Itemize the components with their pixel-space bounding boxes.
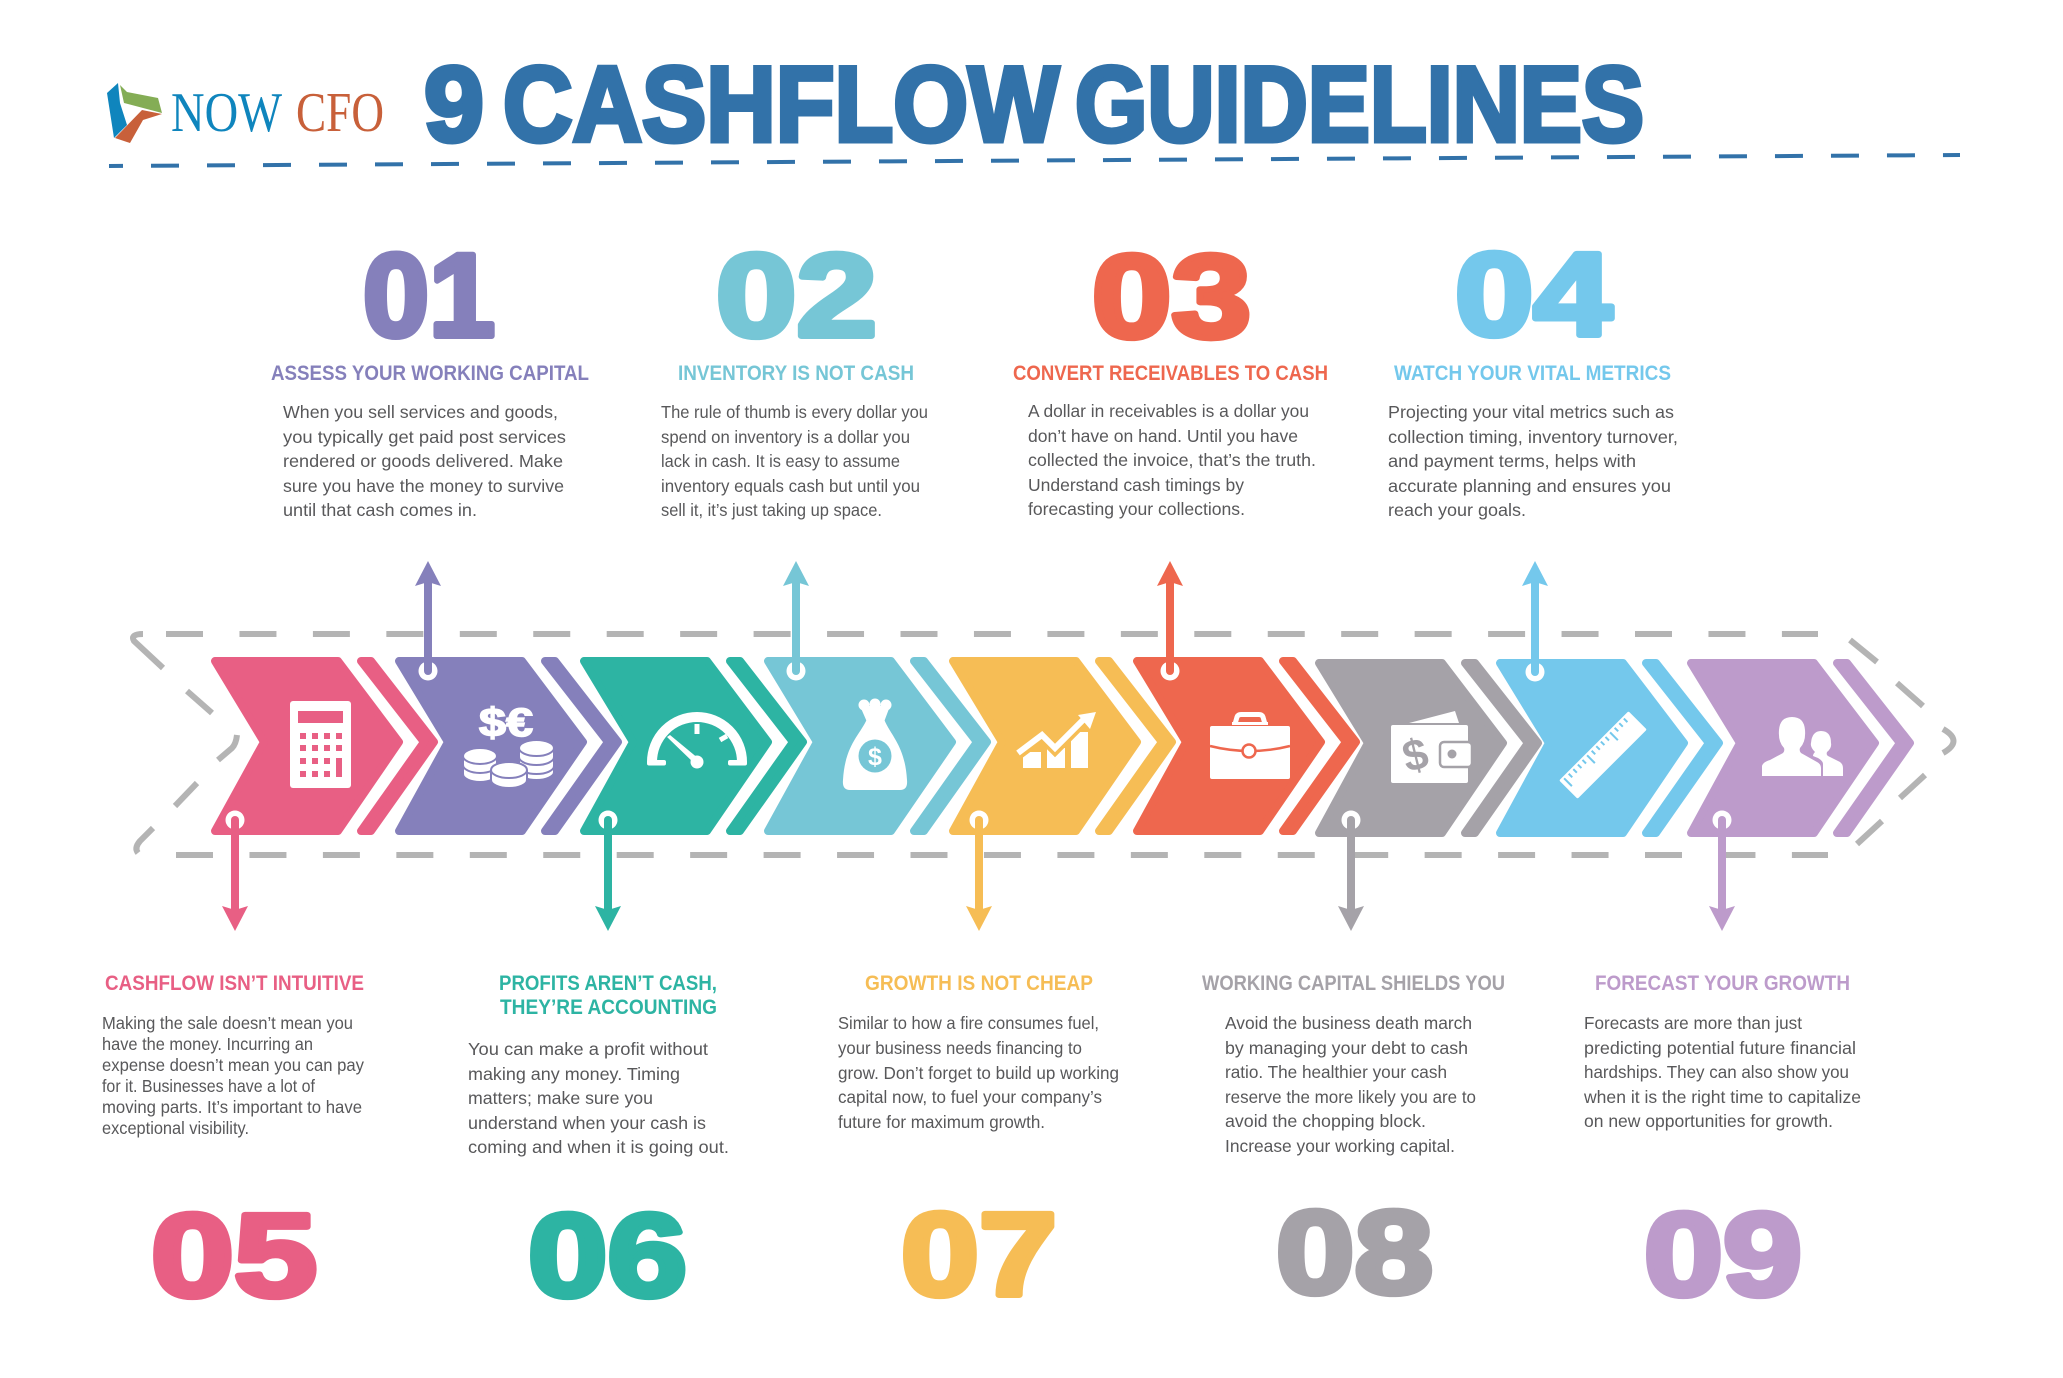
block 01: ASSESS YOUR WORKING CAPITAL: [271, 362, 589, 385]
logo: Now CFO: CFO: [296, 82, 384, 144]
block 07: capital now, to fuel your company’s: [838, 1087, 1102, 1107]
chevron 5: yellow: [953, 661, 1172, 831]
block 02: [661, 230, 928, 520]
block 01: you typically get paid post services: [283, 427, 566, 447]
block 05: [102, 972, 364, 1322]
arrow up 03: [1157, 561, 1183, 680]
block 09: hardships. They can also show you: [1584, 1062, 1849, 1082]
block 02: lack in cash. It is easy to assume: [661, 451, 900, 471]
chevron 2: purple: [399, 661, 618, 831]
block 08: ratio. The healthier your cash: [1225, 1062, 1447, 1082]
icon: currency and coins: $€: [479, 701, 533, 745]
block 06: making any money. Timing: [468, 1064, 680, 1084]
block 08: Avoid the business death march: [1225, 1013, 1472, 1033]
block 04: 04: [1455, 229, 1612, 361]
icon: money bag: $: [868, 743, 882, 771]
block 05: CASHFLOW ISN’T INTUITIVE: [105, 972, 364, 995]
block 04: collection timing, inventory turnover,: [1388, 427, 1678, 447]
block 01: sure you have the money to survive: [283, 476, 564, 496]
chevron 4: light teal: [768, 661, 987, 831]
block 06: understand when your cash is: [468, 1113, 706, 1133]
block 04: [1388, 229, 1678, 520]
block 01: until that cash comes in.: [283, 500, 477, 520]
block 04: accurate planning and ensures you: [1388, 476, 1671, 496]
block 08: WORKING CAPITAL SHIELDS YOU: [1202, 972, 1505, 995]
block 04: WATCH YOUR VITAL METRICS: [1394, 362, 1671, 385]
block 06: You can make a profit without: [468, 1039, 708, 1059]
block 01: rendered or goods delivered. Make: [283, 451, 563, 471]
block 06: matters; make sure you: [468, 1088, 653, 1108]
block 09: on new opportunities for growth.: [1584, 1111, 1833, 1131]
arrow down 08: [1338, 810, 1364, 931]
icon: calculator: [290, 701, 351, 788]
block 05: Making the sale doesn’t mean you: [102, 1013, 353, 1033]
chevron 1: pink: [215, 661, 434, 831]
block 06: PROFITS AREN’T CASH,: [499, 972, 717, 995]
block 05: expense doesn’t mean you can pay: [102, 1055, 364, 1075]
block 07: future for maximum growth.: [838, 1112, 1045, 1132]
title: [424, 44, 1644, 164]
block 02: INVENTORY IS NOT CASH: [678, 362, 914, 385]
icon: wallet: $: [1398, 729, 1433, 782]
icon: briefcase: [1210, 714, 1290, 779]
logo: Now CFO: [107, 82, 384, 144]
block 05: moving parts. It’s important to have: [102, 1097, 362, 1117]
block 04: and payment terms, helps with: [1388, 451, 1636, 471]
block 06: [468, 972, 729, 1322]
icon: currency and coins: [463, 701, 554, 788]
icon: wallet: [1391, 711, 1472, 783]
arrow down 09: [1709, 810, 1735, 931]
icon: speedometer: [647, 717, 747, 768]
block 07: Similar to how a fire consumes fuel,: [838, 1013, 1099, 1033]
block 03: A dollar in receivables is a dollar you: [1028, 401, 1309, 421]
block 08: reserve the more likely you are to: [1225, 1087, 1476, 1107]
block 07: GROWTH IS NOT CHEAP: [865, 972, 1093, 995]
block 07: your business needs financing to: [838, 1038, 1082, 1058]
title: GUIDELINES: [1075, 44, 1644, 164]
block 09: FORECAST YOUR GROWTH: [1595, 972, 1850, 995]
block 06: 06: [528, 1190, 687, 1322]
block 09: [1583, 972, 1861, 1321]
block 03: don’t have on hand. Until you have: [1028, 426, 1298, 446]
arrow up 01: [415, 561, 441, 680]
chevron 9: lilac: [1691, 663, 1910, 833]
arrow down 05: [222, 810, 248, 931]
chevron 3: teal: [584, 661, 803, 831]
block 09: Forecasts are more than just: [1584, 1013, 1802, 1033]
block 09: predicting potential future financial: [1584, 1038, 1856, 1058]
block 02: 02: [716, 230, 877, 362]
icon: growth chart: [1018, 712, 1096, 768]
title: CASHFLOW: [503, 44, 1059, 164]
block 04: Projecting your vital metrics such as: [1388, 402, 1674, 422]
block 02: inventory equals cash but until you: [661, 476, 920, 496]
block 08: by managing your debt to cash: [1225, 1038, 1468, 1058]
chevron 6: orange: [1137, 661, 1356, 831]
block 07: 07: [901, 1189, 1057, 1321]
block 01: [271, 230, 589, 520]
title: 9: [424, 44, 484, 164]
block 06: THEY’RE ACCOUNTING: [500, 996, 717, 1019]
arrow down 06: [595, 810, 621, 931]
icon: people: [1762, 717, 1843, 776]
block 02: sell it, it’s just taking up space.: [661, 500, 882, 520]
block 02: spend on inventory is a dollar you: [661, 427, 910, 447]
block 04: reach your goals.: [1388, 500, 1526, 520]
chevron 7: gray: [1319, 663, 1538, 833]
arrow up 04: [1522, 561, 1548, 682]
icon: ruler: [1559, 711, 1647, 799]
block 07: [838, 972, 1119, 1321]
arrow up 02: [783, 561, 809, 680]
block 09: when it is the right time to capitalize: [1583, 1087, 1861, 1107]
block 03: [1013, 231, 1328, 519]
block 08: avoid the chopping block.: [1225, 1111, 1426, 1131]
block 09: 09: [1644, 1189, 1802, 1321]
block 08: 08: [1276, 1187, 1433, 1319]
logo: Now CFO: NOW: [171, 82, 282, 144]
block 03: CONVERT RECEIVABLES TO CASH: [1013, 362, 1328, 385]
block 01: 01: [363, 230, 495, 362]
chevron 8: sky blue: [1500, 663, 1719, 833]
block 03: Understand cash timings by: [1028, 475, 1244, 495]
block 05: have the money. Incurring an: [102, 1034, 313, 1054]
icon: money bag: [843, 698, 907, 790]
block 05: for it. Businesses have a lot of: [102, 1076, 315, 1096]
block 08: [1202, 972, 1505, 1319]
block 01: When you sell services and goods,: [283, 402, 558, 422]
block 03: 03: [1092, 231, 1251, 363]
arrow down 07: [966, 810, 992, 931]
block 03: forecasting your collections.: [1028, 499, 1245, 519]
dashed arrow outline: [133, 634, 1953, 855]
block 05: exceptional visibility.: [102, 1118, 249, 1138]
block 08: Increase your working capital.: [1225, 1136, 1455, 1156]
block 02: The rule of thumb is every dollar you: [661, 402, 928, 422]
block 05: 05: [151, 1190, 317, 1322]
block 07: grow. Don’t forget to build up working: [838, 1063, 1119, 1083]
block 03: collected the invoice, that’s the truth.: [1028, 450, 1316, 470]
block 06: coming and when it is going out.: [468, 1137, 729, 1157]
